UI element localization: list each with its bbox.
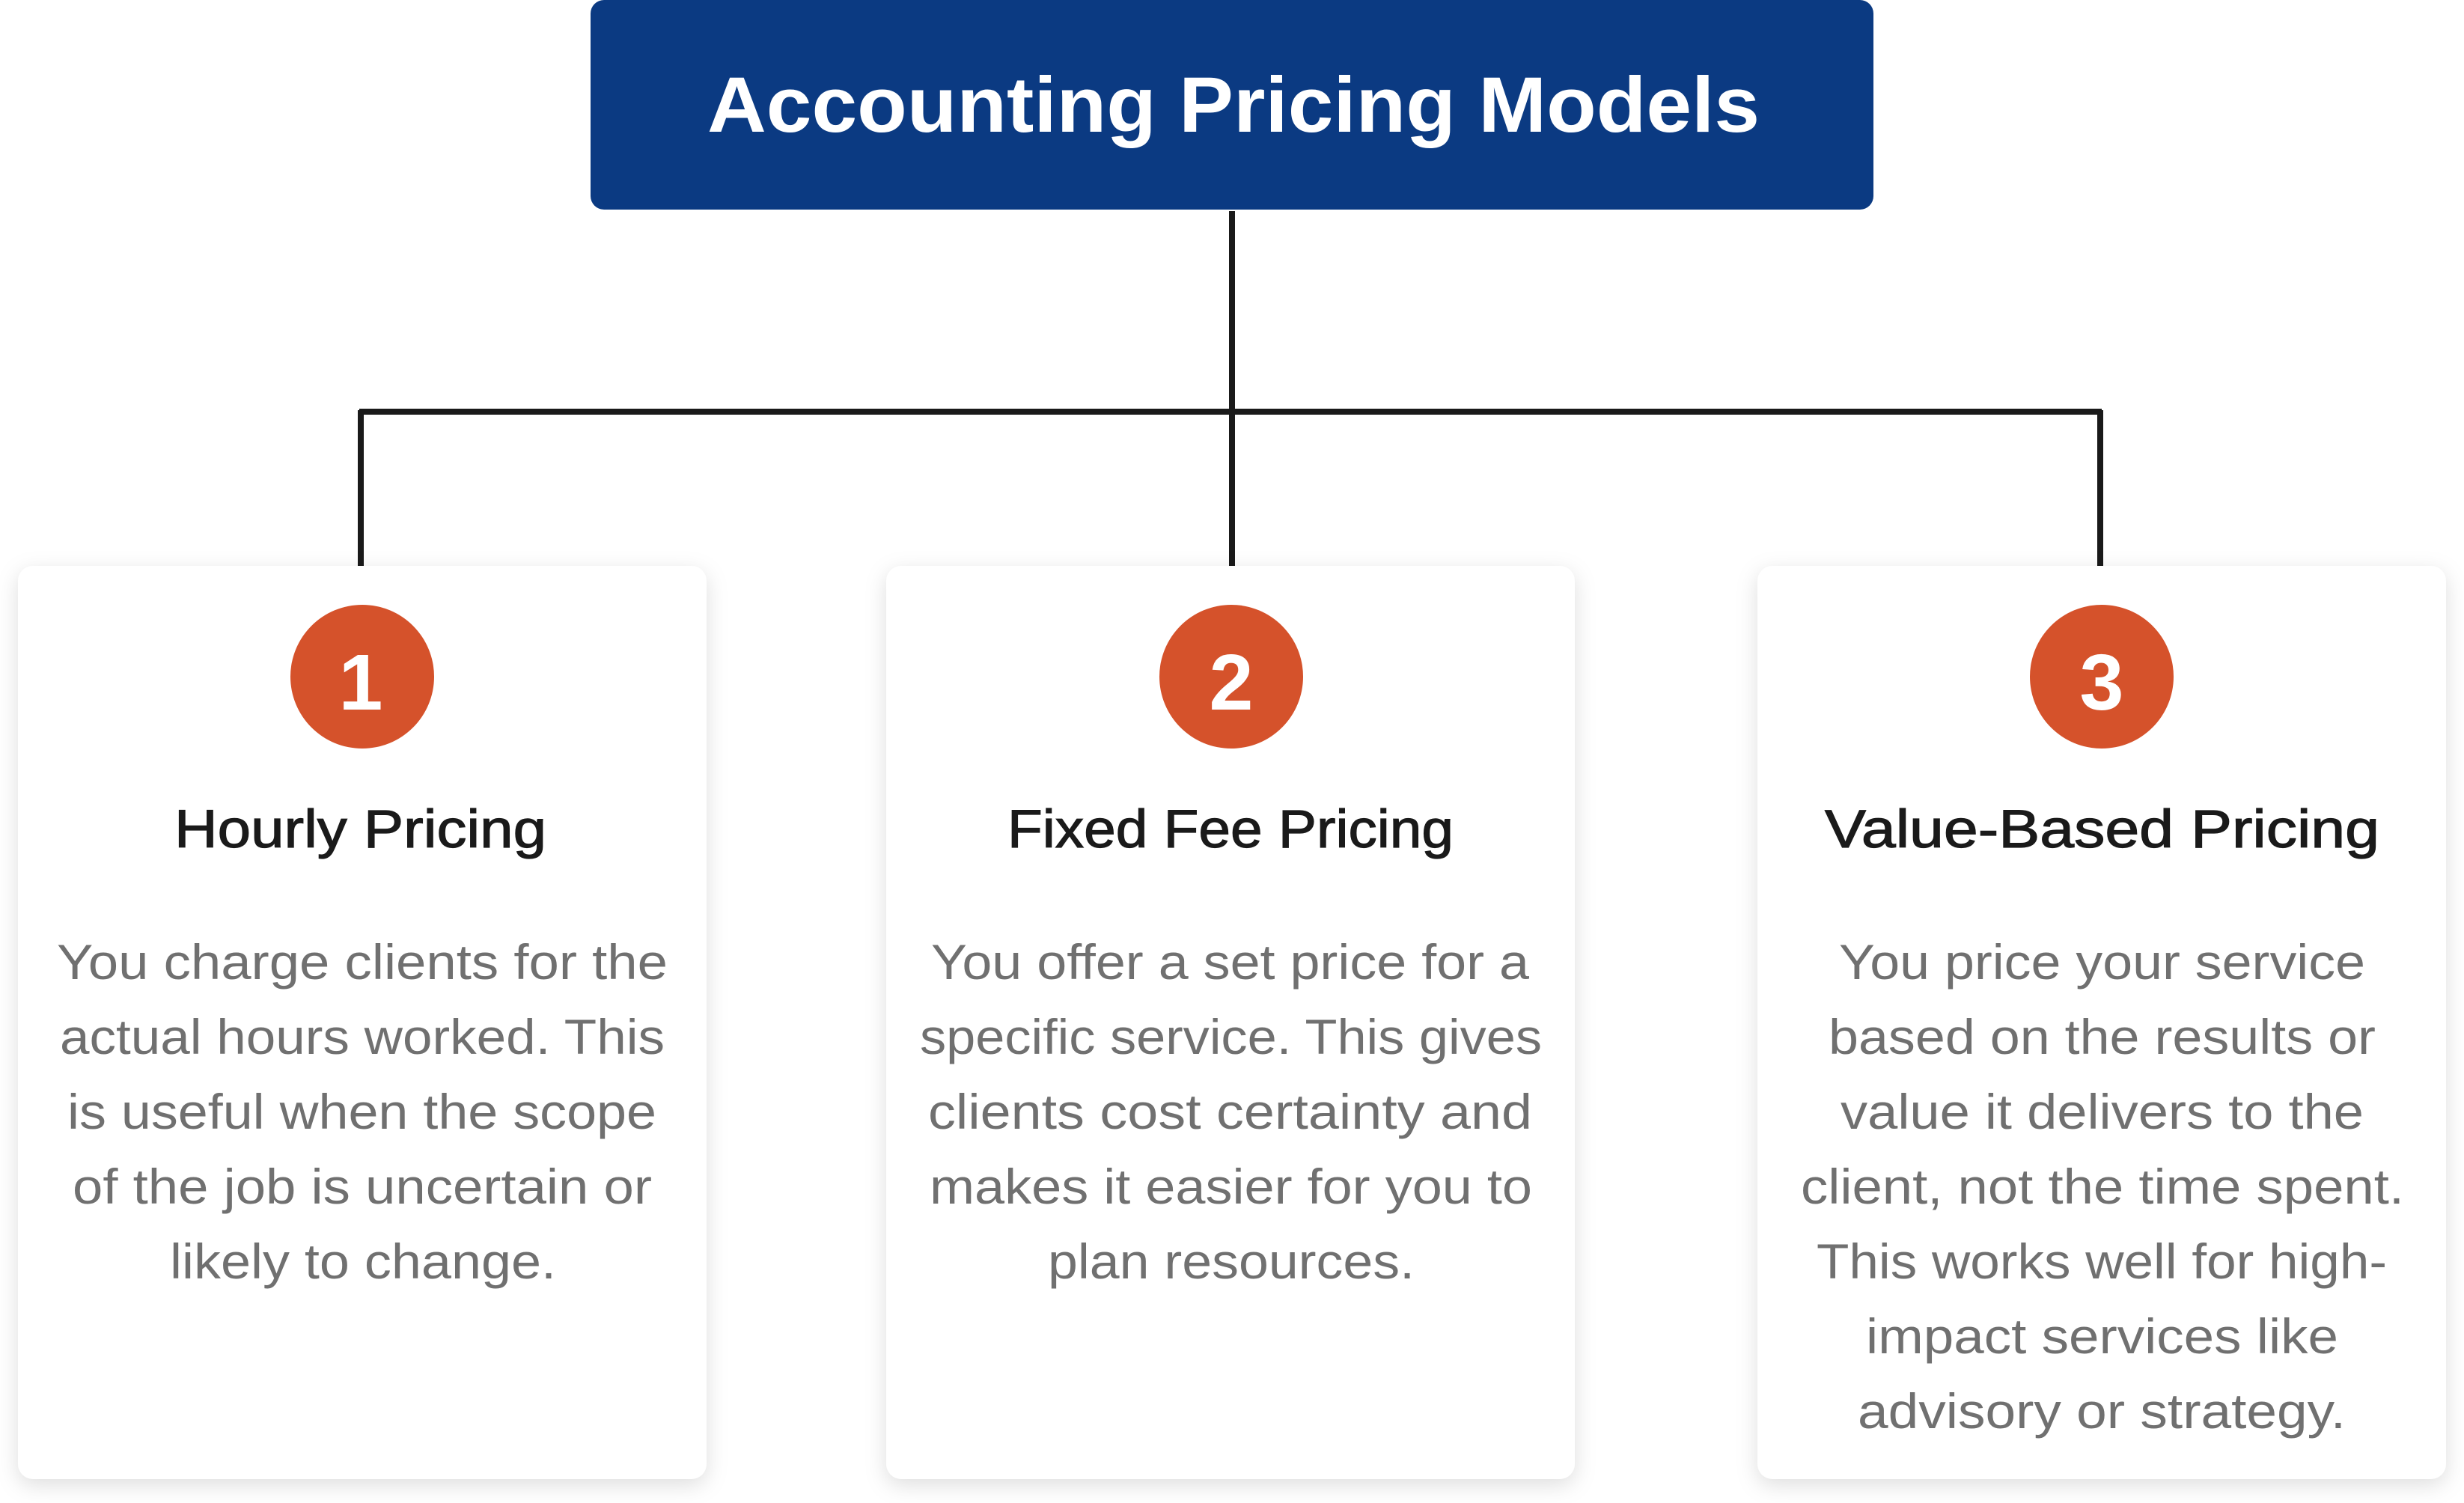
number badge 2: 2 — [1210, 638, 1253, 727]
description: value-based pricing: value it delivers to the — [1841, 1084, 2364, 1139]
number badge 1 — [290, 605, 434, 749]
title banner — [591, 0, 1873, 210]
description: value-based pricing: client, not the time spent. — [1801, 1159, 2404, 1214]
panel: hourly pricing — [18, 566, 707, 1479]
description: hourly pricing: You charge clients for the — [57, 934, 668, 990]
description: value-based pricing: This works well for high- — [1817, 1234, 2387, 1289]
description: hourly pricing — [57, 934, 668, 1289]
description: hourly pricing: is useful when the scope — [67, 1084, 656, 1139]
number badge 1: 1 — [339, 638, 382, 727]
number badge 2 — [1159, 605, 1303, 749]
panel: value-based pricing — [1757, 566, 2446, 1479]
description: fixed fee pricing: You offer a set price for a — [931, 934, 1529, 990]
description: value-based pricing: based on the results or — [1829, 1009, 2376, 1064]
description: value-based pricing: You price your service — [1839, 934, 2365, 990]
heading: value-based pricing: Value-Based Pricing — [1825, 800, 2379, 859]
description: fixed fee pricing: specific service. This gives — [920, 1009, 1542, 1064]
panel: fixed fee pricing — [886, 566, 1575, 1479]
description: fixed fee pricing: clients cost certainty and — [928, 1084, 1532, 1139]
description: hourly pricing: of the job is uncertain or — [73, 1159, 652, 1214]
description: value-based pricing: impact services like — [1866, 1308, 2338, 1364]
number badge 3 — [2030, 605, 2174, 749]
number badge 3: 3 — [2080, 638, 2123, 727]
title banner: Accounting Pricing Models — [707, 61, 1760, 149]
heading: hourly pricing: Hourly Pricing — [174, 800, 546, 859]
description: value-based pricing — [1801, 934, 2404, 1439]
description: fixed fee pricing: makes it easier for you to — [930, 1159, 1532, 1214]
heading: fixed fee pricing: Fixed Fee Pricing — [1007, 800, 1454, 859]
description: hourly pricing: actual hours worked. This — [60, 1009, 665, 1064]
description: fixed fee pricing: plan resources. — [1048, 1234, 1415, 1289]
connector lines — [358, 211, 2103, 566]
description: hourly pricing: likely to change. — [170, 1234, 556, 1289]
description: fixed fee pricing — [920, 934, 1542, 1289]
description: value-based pricing: advisory or strategy. — [1858, 1383, 2346, 1439]
